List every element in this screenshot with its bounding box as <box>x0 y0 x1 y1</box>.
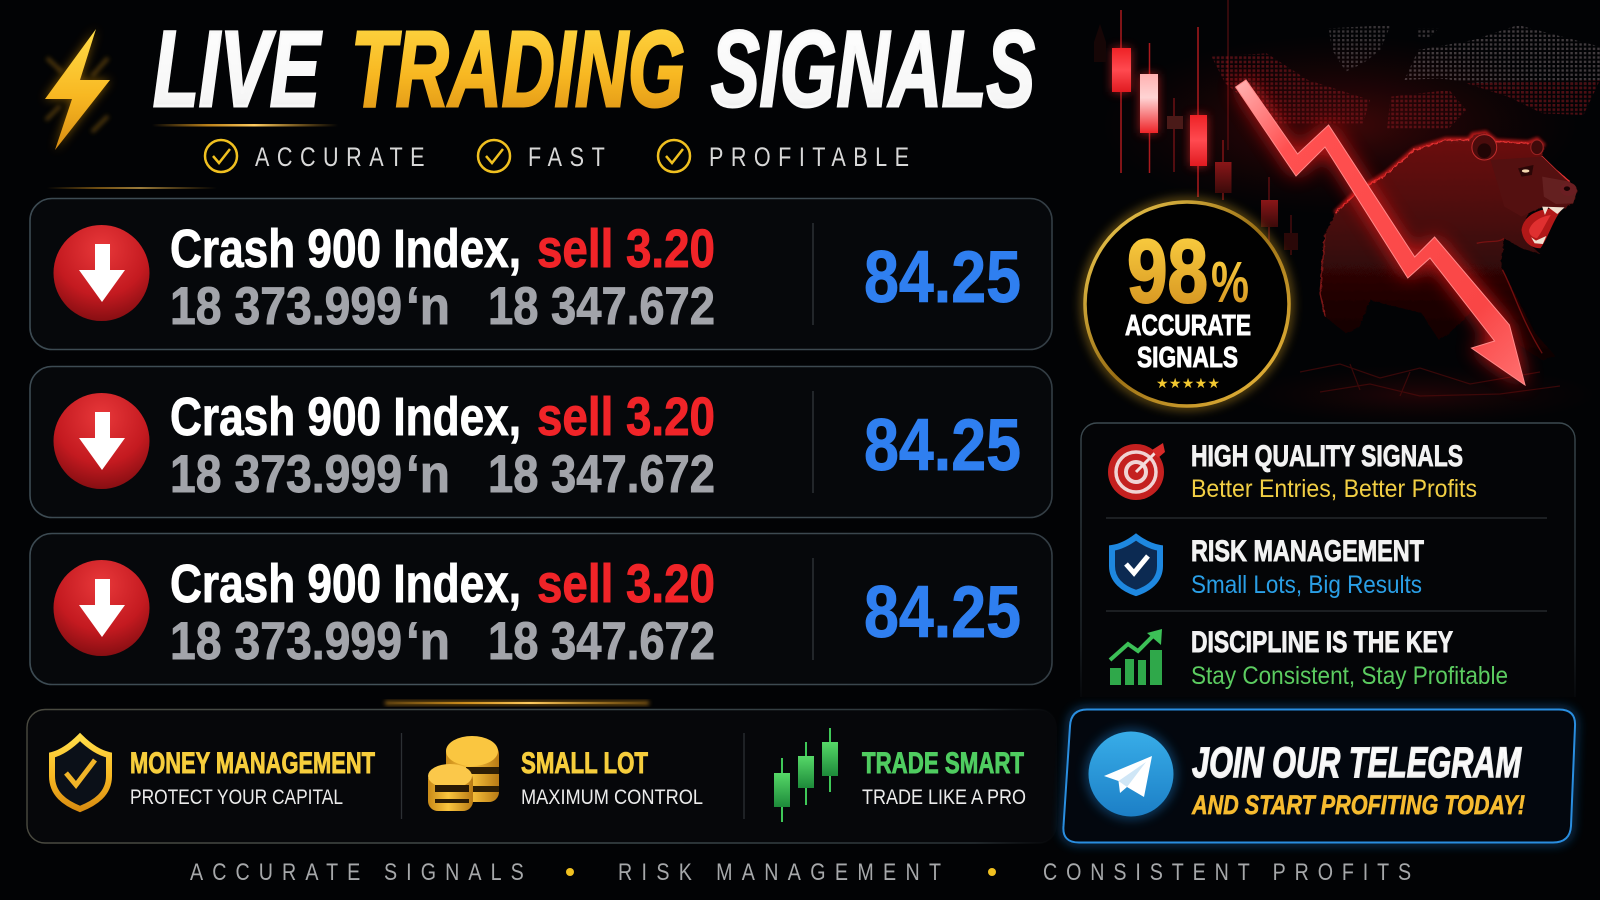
tip: risk management: Small Lots, Big Results <box>1191 571 1422 599</box>
text: trade smart: TRADE LIKE A PRO <box>862 786 1026 809</box>
icon: red down arrow <box>54 225 150 321</box>
profit value: 84.25 <box>864 572 1021 653</box>
telegram call to action <box>1063 710 1575 842</box>
signal text <box>170 387 715 504</box>
check: fast: FAST <box>528 143 605 173</box>
footer tagline: ACCURATE SIGNALS <box>190 858 524 885</box>
signal card 3 <box>30 534 1052 684</box>
title: SIGNALS <box>711 8 1035 129</box>
check: accurate: ACCURATE <box>255 143 425 173</box>
hero: cracked ground <box>1300 364 1560 396</box>
icon: gold coins <box>428 736 499 811</box>
signal text: Crash 900 Index, <box>170 219 521 279</box>
signal text <box>170 554 715 671</box>
telegram call to action: AND START PROFITING TODAY! <box>1191 790 1525 820</box>
text: small lot: MAXIMUM CONTROL <box>521 786 703 809</box>
footer tagline <box>190 858 1411 885</box>
tip: discipline <box>1110 626 1508 690</box>
footer tagline: RISK MANAGEMENT <box>618 858 941 885</box>
tip: risk management: RISK MANAGEMENT <box>1191 535 1424 568</box>
text: money management: MONEY MANAGEMENT <box>130 747 375 780</box>
icon: gold shield <box>52 737 109 809</box>
title: TRADING <box>351 8 685 129</box>
signal text: Crash 900 Index, <box>170 554 521 614</box>
title lightning bolt <box>45 29 110 150</box>
profit value: 84.25 <box>864 405 1021 486</box>
tip: high quality signals: Better Entries, Better Profits <box>1191 475 1477 503</box>
text: trade smart: TRADE SMART <box>862 747 1024 780</box>
text: money management <box>130 747 375 809</box>
text: money management: PROTECT YOUR CAPITAL <box>130 786 343 809</box>
icon: red down arrow <box>54 393 150 489</box>
signal text: 18 347.672 <box>488 277 715 336</box>
text: trade smart <box>862 747 1026 809</box>
tip: high quality signals: HIGH QUALITY SIGNALS <box>1191 440 1463 473</box>
hero: snarling bear <box>1320 133 1577 360</box>
feature checks row <box>205 140 909 173</box>
tip: risk management <box>1112 535 1424 599</box>
check: profitable: PROFITABLE <box>709 143 909 173</box>
title underline glows <box>47 124 338 189</box>
signal card 2 <box>30 366 1052 518</box>
signal text: sell 3.20 <box>537 219 715 279</box>
title <box>153 8 1035 129</box>
hero: red glow behind bear <box>1100 35 1600 425</box>
signal text: ‘n <box>406 612 450 671</box>
signal text: ‘n <box>406 445 450 504</box>
icon: green candles <box>774 728 838 822</box>
accuracy badge: % <box>1211 250 1249 315</box>
title: LIVE <box>153 8 322 129</box>
icon: telegram plane <box>1085 728 1177 820</box>
tip: discipline: DISCIPLINE IS THE KEY <box>1191 626 1453 659</box>
signal text: sell 3.20 <box>537 554 715 614</box>
text: small lot: SMALL LOT <box>521 747 648 780</box>
hero: dotted world map <box>1212 25 1600 128</box>
check: fast <box>478 140 605 173</box>
signal text: 18 373.999 <box>170 612 402 671</box>
icon: red down arrow <box>54 560 150 656</box>
signal text: ‘n <box>406 277 450 336</box>
accuracy badge: SIGNALS <box>1137 342 1238 374</box>
hero: red candlesticks <box>1094 0 1298 255</box>
icon: blue shield <box>1112 537 1160 593</box>
signal text: 18 347.672 <box>488 612 715 671</box>
tip: discipline: Stay Consistent, Stay Profitable <box>1191 662 1508 690</box>
tip: high quality signals <box>1108 440 1477 503</box>
icon: target <box>1108 443 1165 500</box>
hero: falling red arrow <box>1236 80 1525 385</box>
signal text: 18 373.999 <box>170 445 402 504</box>
icon: green growth chart <box>1110 629 1162 685</box>
signal text <box>170 219 715 336</box>
signal text: Crash 900 Index, <box>170 387 521 447</box>
bottom bar glow line <box>385 701 649 705</box>
accuracy badge: ★★★★★ <box>1156 375 1220 391</box>
signal text: sell 3.20 <box>537 387 715 447</box>
panel: money, lot, trade smart <box>27 710 1057 843</box>
accuracy badge: ACCURATE <box>1125 310 1251 342</box>
signal text: 18 373.999 <box>170 277 402 336</box>
footer tagline: CONSISTENT PROFITS <box>1043 858 1411 885</box>
signal card 1 <box>30 198 1052 350</box>
profit value: 84.25 <box>864 237 1021 318</box>
panel: signal quality tips <box>1081 423 1575 697</box>
text: small lot <box>521 747 703 809</box>
accuracy badge: 98 <box>1127 222 1208 322</box>
accuracy badge <box>1085 202 1289 406</box>
signal text: 18 347.672 <box>488 445 715 504</box>
